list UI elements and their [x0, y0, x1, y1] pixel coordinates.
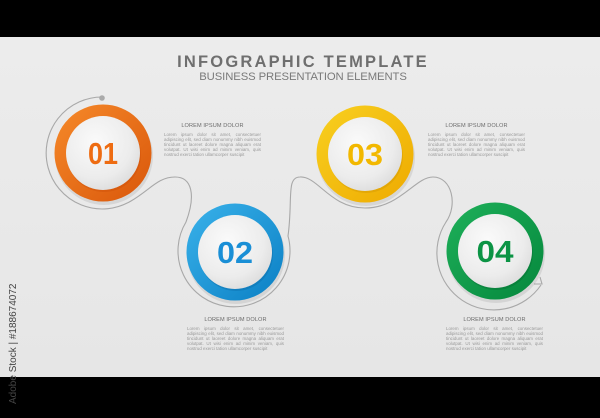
circle 02	[186, 204, 285, 304]
circle 04	[446, 202, 545, 303]
text block 03: Lorem ipsum dolor sit amet, consectetuer adipiscing elit, sed diam nonummy nibh euismod tincidunt ut laoreet dolore magna aliquam erat volutpat. Ut wisi enim ad minim veniam, quis nostrud exerci tation ullamcorper suscipit	[428, 132, 525, 157]
dot: start	[99, 95, 105, 101]
text block 04: Lorem ipsum dolor sit amet, consectetuer adipiscing elit, sed diam nonummy nibh euismod tincidunt ut laoreet dolore magna aliquam erat volutpat. Ut wisi enim ad minim veniam, quis nostrud exerci tation ullamcorper suscipit	[446, 326, 543, 351]
text block 02: LOREM IPSUM DOLOR	[204, 317, 267, 323]
vertical stock id: Adobe Stock | #188674072	[8, 284, 19, 404]
text block 01: Lorem ipsum dolor sit amet, consectetuer adipiscing elit, sed diam nonummy nibh euismod tincidunt ut laoreet dolore magna aliquam erat volutpat. Ut wisi enim ad minim veniam, quis nostrud exerci tation ullamcorper suscipit	[164, 132, 261, 157]
text block 04: LOREM IPSUM DOLOR	[463, 317, 526, 323]
circle 03	[316, 106, 415, 206]
circle 01: 01	[88, 136, 118, 171]
title: INFOGRAPHIC TEMPLATE	[177, 53, 429, 71]
circle 02: 02	[217, 235, 253, 270]
text block 02: Lorem ipsum dolor sit amet, consectetuer adipiscing elit, sed diam nonummy nibh euismod tincidunt ut laoreet dolore magna aliquam erat volutpat. Ut wisi enim ad minim veniam, quis nostrud exerci tation ullamcorper suscipit	[187, 326, 284, 351]
text block 03: LOREM IPSUM DOLOR	[445, 123, 508, 129]
text block 01: LOREM IPSUM DOLOR	[181, 123, 244, 129]
circle 04: 04	[476, 234, 514, 269]
circle 01	[54, 104, 153, 205]
subtitle: BUSINESS PRESENTATION ELEMENTS	[199, 70, 407, 82]
connector line	[46, 97, 542, 310]
circle 03: 03	[347, 137, 383, 172]
